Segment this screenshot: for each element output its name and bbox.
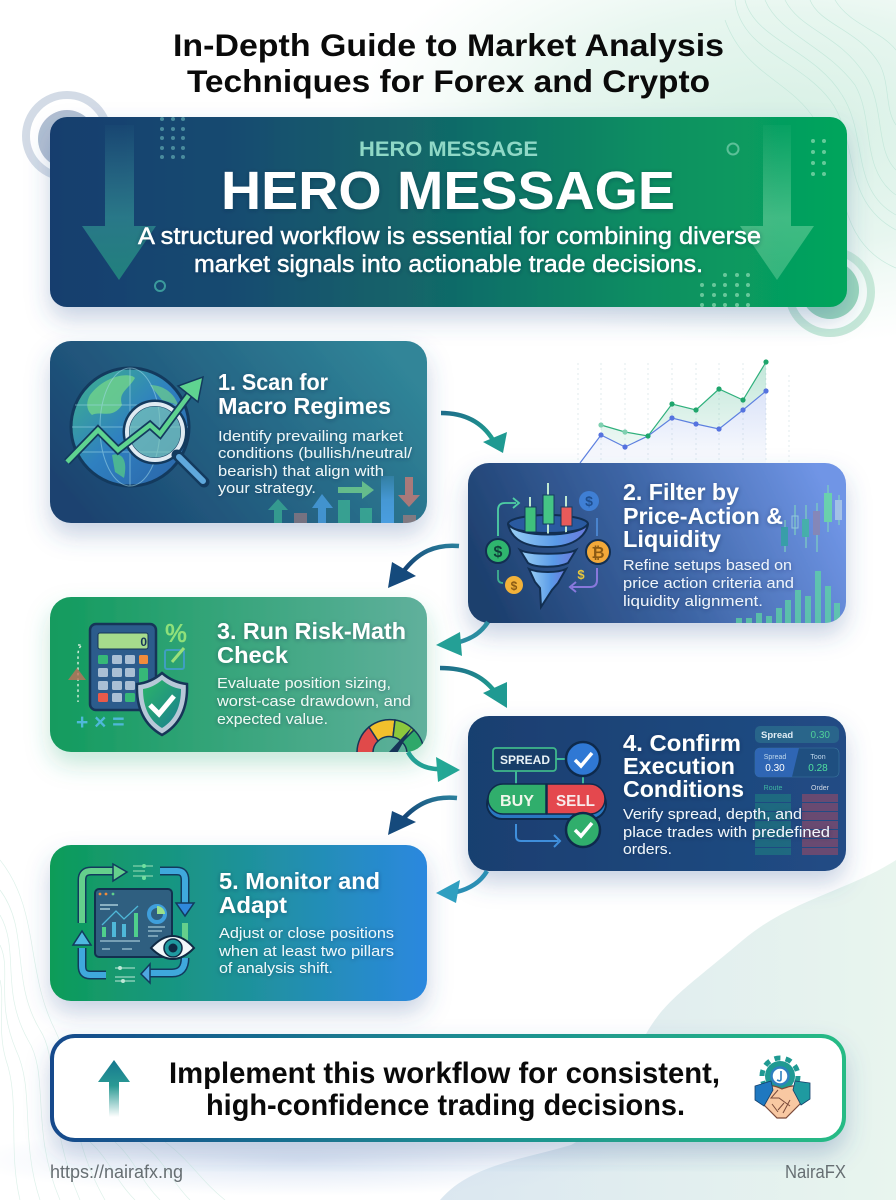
step 5 heading <box>219 868 380 918</box>
icon: calculator with shield: % <box>165 618 187 648</box>
icon: funnel with candles and coins: $ <box>494 544 503 561</box>
step 1 description: your strategy. <box>218 481 316 497</box>
title: Techniques for Forex and Crypto <box>187 63 710 99</box>
step 2 heading: Liquidity <box>623 526 721 552</box>
step 1 description: Identify prevailing market <box>218 429 403 445</box>
step 2 heading <box>623 479 783 552</box>
title: In-Depth Guide to Market Analysis <box>173 27 724 63</box>
step 1 description: conditions (bullish/neutral/ <box>218 446 413 462</box>
step 4 description <box>623 807 830 858</box>
step 4 market data widgets: Spread <box>761 730 793 741</box>
hero subtitle: A structured workflow is essential for combining diverse <box>138 223 761 250</box>
step 5 heading: 5. Monitor and <box>219 868 380 894</box>
step 2 description: Refine setups based on <box>623 558 792 574</box>
step 4 market data widgets <box>755 726 839 855</box>
icon: gear and handshake <box>755 1058 810 1118</box>
panel: call to action <box>52 1036 844 1140</box>
step 2 heading: 2. Filter by <box>623 479 739 505</box>
decorative target circles behind hero <box>26 95 871 333</box>
step 2 heading: Price-Action & <box>623 503 783 529</box>
step 3 description: Evaluate position sizing, <box>217 676 391 692</box>
icon: calculator with shield: + × = <box>76 711 124 734</box>
icon: spread, buy and sell buttons with checks <box>487 742 606 847</box>
step 4 description: Verify spread, depth, and <box>623 807 802 823</box>
arrow: step 4 to step 5 lower <box>436 871 487 903</box>
panel: hero message <box>50 117 847 307</box>
hero decorations: arrows, dots, rings <box>82 117 826 307</box>
step 5 description: when at least two pillars <box>218 944 394 960</box>
step 4 heading: Execution <box>623 753 735 779</box>
line chart behind step 2 <box>578 359 789 463</box>
step 1 description: bearish) that align with <box>218 464 384 480</box>
arrow: step 3 to step 4 upper <box>440 668 507 708</box>
hero subtitle: market signals into actionable trade decisions. <box>194 251 703 278</box>
step 4 market data widgets: 0.28 <box>808 763 828 774</box>
step 3 heading: 3. Run Risk-Math <box>217 618 406 644</box>
step 3 description <box>216 676 411 728</box>
icon: spread, buy and sell buttons with checks: SPREAD <box>500 755 550 767</box>
arrow: step 4 to step 5 upper <box>388 798 457 835</box>
step 2 description: liquidity alignment. <box>623 594 763 610</box>
step 3 description: expected value. <box>217 712 328 728</box>
step 3 heading <box>217 618 406 668</box>
panel: step 4 confirm execution conditions <box>468 716 846 871</box>
panel: step 1 scan for macro regimes <box>50 341 427 523</box>
step 5 description: of analysis shift. <box>219 961 333 977</box>
footer brand: NairaFX <box>785 1162 846 1182</box>
icon: funnel with candles and coins <box>486 483 610 607</box>
step 4 heading <box>623 730 744 802</box>
icon: globe with magnifier and trend arrow <box>67 368 204 486</box>
step 4 market data widgets: Spread <box>764 754 786 761</box>
hero eyebrow: HERO MESSAGE <box>359 138 538 161</box>
arrow: step 1 to step 2 <box>441 413 507 453</box>
icon: up arrow <box>98 1060 130 1117</box>
step 5 description <box>218 926 394 977</box>
step 1 heading <box>218 369 391 419</box>
icon: risk gauge <box>357 720 424 755</box>
arrow: step 2 to step 3 lower <box>436 622 488 656</box>
step 1 heading: Macro Regimes <box>218 393 391 419</box>
step 4 market data widgets: Order <box>811 785 830 792</box>
step 4 description: orders. <box>623 842 672 858</box>
icon: funnel with candles and coins: ₿ <box>591 544 605 562</box>
hero heading: HERO MESSAGE <box>221 161 675 221</box>
step 5 heading: Adapt <box>219 892 287 918</box>
icon: calculator with shield: 0 <box>140 635 147 649</box>
arrow: step 3 to step 4 lower <box>408 752 460 782</box>
arrow: step 2 to step 3 <box>388 546 459 588</box>
step 2 description: price action criteria and <box>623 576 794 592</box>
step 2 description <box>623 558 794 610</box>
title <box>173 27 724 99</box>
hero subtitle <box>138 223 761 278</box>
step 4 market data widgets: Toon <box>810 754 826 761</box>
step 3 description: worst-case drawdown, and <box>216 694 411 710</box>
icon: funnel with candles and coins: $ <box>585 493 593 509</box>
call to action text <box>169 1057 720 1122</box>
icon: spread, buy and sell buttons with checks: SELL <box>556 793 595 810</box>
step 1 mini market bars <box>268 476 420 523</box>
panel: step 3 run risk-math check <box>50 597 427 755</box>
icon: calculator with shield <box>68 618 187 735</box>
step 4 heading: 4. Confirm <box>623 730 741 756</box>
icon: dashboard with cycle arrows and eye <box>73 864 194 983</box>
step 1 description <box>218 429 413 497</box>
step 4 market data widgets: Route <box>764 785 782 792</box>
call to action text: high-confidence trading decisions. <box>206 1089 685 1122</box>
step 3 heading: Check <box>217 642 289 668</box>
call to action text: Implement this workflow for consistent, <box>169 1057 720 1090</box>
step 4 heading: Conditions <box>623 776 744 802</box>
step 4 description: place trades with predefined <box>623 825 830 841</box>
icon: spread, buy and sell buttons with checks: BUY <box>500 793 535 810</box>
panel: step 2 filter by price action and liquidity <box>468 463 846 623</box>
icon: funnel with candles and coins: $ <box>511 579 518 593</box>
step 4 market data widgets: 0.30 <box>765 763 785 774</box>
panel: step 5 monitor and adapt <box>50 845 427 1001</box>
step 4 market data widgets: 0.30 <box>811 730 830 741</box>
step 2 faint candles and bars <box>736 485 842 623</box>
footer url: https://nairafx.ng <box>50 1162 183 1182</box>
icon: funnel with candles and coins: $ <box>577 567 585 582</box>
step 1 heading: 1. Scan for <box>218 369 328 395</box>
step 5 description: Adjust or close positions <box>219 926 394 942</box>
